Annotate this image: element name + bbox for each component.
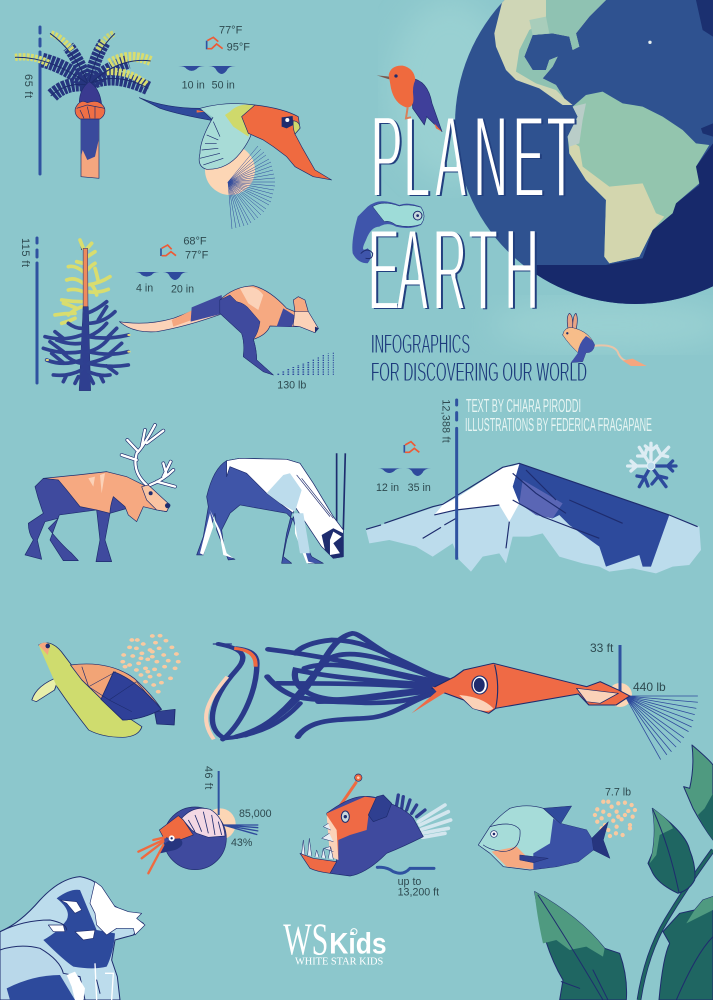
panel: araucaria tree bbox=[19, 238, 130, 391]
illustration: anglerfish bbox=[300, 774, 451, 898]
snow cap bbox=[434, 464, 519, 522]
logo: White Star Kids: Kids bbox=[329, 927, 387, 960]
mountain base bbox=[366, 463, 701, 573]
temperature icon bbox=[158, 248, 163, 256]
tail fin bbox=[418, 805, 451, 837]
leaf: upper right bbox=[684, 745, 713, 840]
body bbox=[478, 806, 593, 870]
head bbox=[327, 797, 377, 860]
dorsal fin bbox=[543, 806, 572, 825]
gill and eye bbox=[483, 824, 520, 852]
depth wave bbox=[377, 867, 434, 873]
rainfall labels: 12 in bbox=[376, 482, 399, 494]
label: 7.7 lb: 7.7 lb bbox=[605, 787, 631, 799]
chart: parrot wingspan fan and disc bbox=[205, 145, 275, 229]
depth label: 13,200 ft bbox=[398, 886, 439, 898]
egg dots bbox=[123, 636, 178, 692]
climate: araucaria forest temperature and rainfall bbox=[135, 235, 209, 296]
labels bbox=[590, 641, 666, 694]
leaf: lower left bbox=[535, 892, 627, 1000]
rainfall labels bbox=[376, 482, 431, 494]
temperature labels bbox=[183, 235, 209, 262]
mountain shadow bbox=[513, 463, 669, 567]
height bar: 12,388 ft bbox=[452, 400, 461, 558]
title: Planet Earth: PLANET bbox=[371, 91, 576, 222]
temperature labels: 68°F bbox=[183, 235, 207, 247]
mountain outline bbox=[366, 463, 698, 548]
tree illustration bbox=[43, 240, 130, 391]
rainfall labels: 20 in bbox=[171, 284, 194, 296]
disc bbox=[204, 808, 236, 840]
title: Planet Earth bbox=[368, 91, 578, 336]
fan lines bbox=[223, 825, 258, 835]
logo: White Star Kids bbox=[283, 914, 387, 967]
title: Planet Earth: EARTH bbox=[368, 204, 539, 335]
tail bbox=[592, 822, 610, 858]
rainfall labels: 35 in bbox=[408, 482, 431, 494]
panel: palm tree bbox=[15, 27, 151, 178]
rainfall labels bbox=[136, 283, 194, 296]
height bar: 115 ft bbox=[36, 238, 38, 383]
egg dots bbox=[595, 802, 635, 836]
logo: White Star Kids: WHITE STAR KIDS bbox=[295, 956, 383, 967]
illustration: giant squid with fan chart bbox=[206, 633, 698, 760]
illustration: sea turtle with egg dots bbox=[32, 636, 178, 737]
depth bar: 46 ft bbox=[216, 771, 222, 815]
jaw and teeth bbox=[300, 853, 337, 873]
length bar: 33 ft bbox=[618, 645, 622, 695]
subtitle: INFOGRAPHICS bbox=[371, 329, 470, 359]
labels: 43% bbox=[231, 837, 253, 849]
hood bbox=[159, 816, 193, 840]
weight dots bbox=[278, 352, 333, 375]
illustration: piranha with egg dots bbox=[478, 787, 635, 870]
icon: red bird bbox=[377, 66, 442, 132]
climate: rainforest temperature and rainfall bbox=[178, 24, 250, 91]
temperature icon bbox=[204, 41, 209, 49]
labels: 33 ft bbox=[590, 641, 614, 655]
illustration: oryx bbox=[197, 453, 345, 563]
illustration: tropical leaves bbox=[535, 745, 713, 1000]
palm illustration bbox=[15, 33, 151, 178]
rainfall labels: 50 in bbox=[212, 79, 235, 91]
labels: 440 lb bbox=[633, 680, 666, 694]
temperature labels bbox=[219, 24, 250, 53]
body bbox=[327, 796, 423, 876]
leaf: lower right bbox=[659, 897, 713, 1000]
icon: chameleon bbox=[352, 201, 424, 263]
label: 115 ft: 115 ft bbox=[19, 238, 31, 267]
depth label bbox=[398, 876, 439, 898]
rainfall labels: 4 in bbox=[136, 283, 153, 295]
tentacles bbox=[138, 837, 165, 873]
illustration: kangaroo with weight chart bbox=[119, 286, 333, 391]
label: 130 lb: 130 lb bbox=[277, 379, 306, 391]
lure bbox=[338, 782, 357, 808]
panel: volcano bbox=[366, 399, 701, 573]
rainfall labels bbox=[182, 79, 235, 91]
temperature icon bbox=[402, 445, 407, 453]
stem bbox=[639, 850, 713, 1000]
label: 46 ft: 46 ft bbox=[202, 766, 214, 789]
disc bbox=[608, 683, 632, 707]
illustration: great wave bbox=[0, 877, 145, 1000]
title: Planet Earth: PLANET bbox=[373, 92, 578, 223]
temperature labels: 95°F bbox=[227, 41, 250, 53]
leaf: center bbox=[648, 808, 695, 893]
globe bbox=[455, 0, 713, 304]
rainfall icons bbox=[178, 66, 236, 74]
illustration: reindeer bbox=[25, 425, 175, 562]
shell bbox=[164, 807, 226, 870]
illustration: macaw bbox=[139, 98, 332, 180]
labels: 85,000 bbox=[239, 808, 272, 820]
foam bbox=[48, 882, 145, 940]
label: 65 ft: 65 ft bbox=[22, 74, 34, 98]
subtitle bbox=[371, 329, 587, 387]
credits: TEXT BY CHIARA PIRODDI bbox=[466, 396, 581, 416]
icon: jerboa bbox=[563, 313, 647, 366]
logo: White Star Kids: WS bbox=[283, 914, 328, 964]
rainfall labels: 10 in bbox=[182, 79, 205, 91]
credits bbox=[465, 396, 652, 435]
temperature labels: 77°F bbox=[185, 250, 209, 262]
rainfall icons bbox=[135, 272, 188, 280]
rainfall icons bbox=[378, 468, 431, 476]
labels bbox=[231, 808, 272, 849]
illustration: nautilus with chart bbox=[138, 766, 272, 873]
icon: snowflake bbox=[628, 443, 676, 487]
depth label: up to bbox=[398, 876, 421, 888]
fan chart bbox=[625, 696, 698, 760]
title: Planet Earth: EARTH bbox=[370, 205, 541, 336]
squid illustration bbox=[206, 633, 630, 739]
height bar: 65 ft bbox=[38, 27, 42, 174]
label: 12,388 ft: 12,388 ft bbox=[439, 399, 451, 443]
temperature labels: 77°F bbox=[219, 24, 243, 36]
